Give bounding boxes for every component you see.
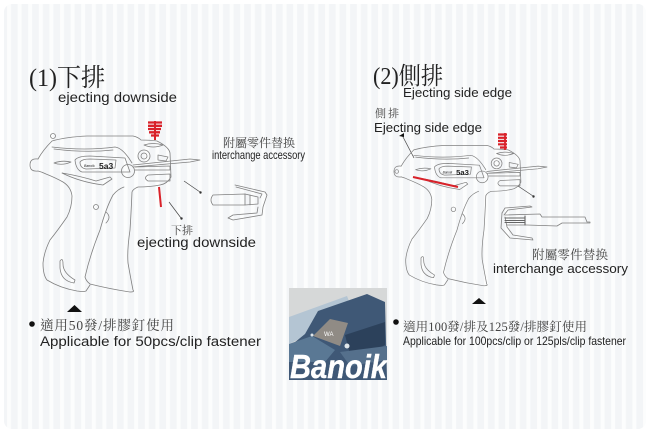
downside label [137,223,256,250]
icon: tag gun, side [394,145,547,286]
accessory label: interchange accessory [493,262,629,276]
icon: tag gun, downside: 5a3 [99,161,113,171]
icon: interchange accessory clip [211,185,267,220]
heading: (1) downside: (1)下排 [29,64,105,92]
bullet [393,319,399,325]
icon: red needle ejecting downward [159,187,161,207]
downside label: 下排 [171,223,193,237]
arrow to side ejection [399,133,414,158]
icon: tag gun, downside: Banoik [84,164,95,168]
panel: ejecting side edge [373,63,629,348]
icon: tag gun, side: Banoik [443,170,453,174]
side edge label: Ejecting side edge [374,121,482,135]
subheading: ejecting side edge: Ejecting side edge [403,86,512,100]
triangle marker [472,298,486,304]
usage note: Applicable for 50pcs/clip fastener [40,334,262,349]
icon: red clip comb [148,121,162,140]
icon: tag gun, side: 5a3 [456,168,469,177]
usage note: 適用100發/排及125發/排膠釘使用 [403,319,587,334]
subheading: ejecting downside: ejecting downside [58,90,177,105]
icon: red needle ejecting sideways [413,177,458,187]
icon: red clip comb [498,133,507,150]
brand name: Banoik [290,348,388,385]
usage note [40,317,262,349]
side edge label [374,106,482,135]
photo: shirt with brand tag [289,288,388,385]
usage note [403,319,626,348]
accessory label: 附屬零件替换 [223,135,295,150]
triangle marker [67,305,82,312]
heading: (2) side edge: (2)側排 [373,63,443,90]
accessory label [493,247,629,276]
brand tag: WA [324,332,333,338]
bullet [29,321,35,327]
icon: tag gun, downside [30,134,200,292]
icon: interchange accessory clip [501,206,590,240]
downside label: ejecting downside [137,235,256,250]
arrow to accessory [184,181,202,194]
usage note: 適用50發/排膠釘使用 [40,317,174,333]
arrow to downside label [169,202,183,220]
accessory label: interchange accessory [212,148,305,162]
accessory label: 附屬零件替换 [532,247,608,262]
panel: ejecting downside [29,64,305,349]
side edge label: 側排 [375,106,399,120]
accessory label [212,135,305,162]
arrow to accessory [518,186,535,198]
